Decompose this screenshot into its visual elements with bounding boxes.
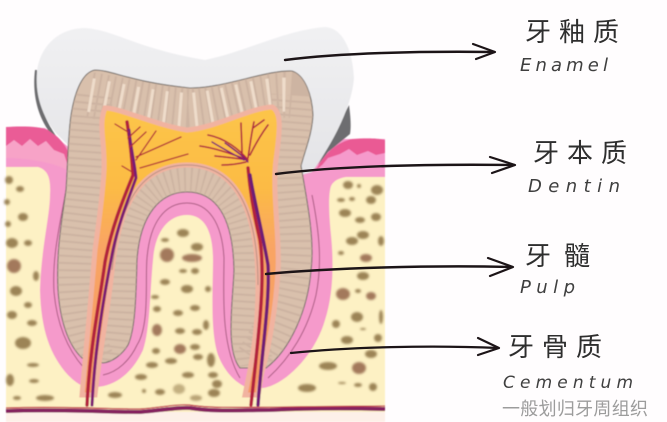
arrow: pulp bbox=[266, 258, 513, 276]
label: dentin bbox=[528, 138, 627, 197]
label: enamel bbox=[520, 17, 619, 76]
enamel layer bbox=[37, 27, 354, 178]
dentin layer bbox=[58, 70, 313, 368]
pulp inner edge line bbox=[112, 165, 258, 285]
label: dentin: 牙本质 bbox=[533, 138, 627, 168]
bone spots bbox=[4, 176, 384, 401]
label: cementum bbox=[503, 332, 633, 393]
label: cementum: 牙骨质 bbox=[508, 332, 602, 362]
label: pulp bbox=[520, 241, 590, 298]
label: cementum: Cementum bbox=[503, 373, 633, 393]
arrow: dentin bbox=[276, 157, 515, 174]
dentin striations bbox=[75, 95, 292, 365]
arrow: enamel bbox=[285, 44, 495, 60]
illustration wrapper bbox=[4, 27, 385, 422]
pulp chamber and root canals bbox=[82, 107, 279, 395]
label: dentin: Dentin bbox=[528, 176, 620, 197]
blood vessels and nerves bbox=[87, 120, 268, 405]
bottom nerve bundle bbox=[6, 405, 385, 412]
arrow: cementum bbox=[291, 338, 499, 355]
label: pulp: Pulp bbox=[520, 277, 575, 298]
periodontal pink tissue bbox=[6, 127, 385, 388]
label: pulp: 牙髓 bbox=[525, 241, 590, 271]
left gum bbox=[6, 126, 73, 172]
label: enamel: Enamel bbox=[520, 55, 608, 76]
cementum outline bbox=[54, 190, 319, 378]
right gum bbox=[316, 138, 385, 186]
label: enamel: 牙釉质 bbox=[525, 17, 619, 47]
panel: alveolar bone bbox=[6, 165, 385, 412]
enamel shadow bbox=[34, 70, 351, 165]
bottom margin tint bbox=[6, 412, 385, 422]
note: periodontal tissue: 一般划归牙周组织 bbox=[502, 399, 648, 419]
